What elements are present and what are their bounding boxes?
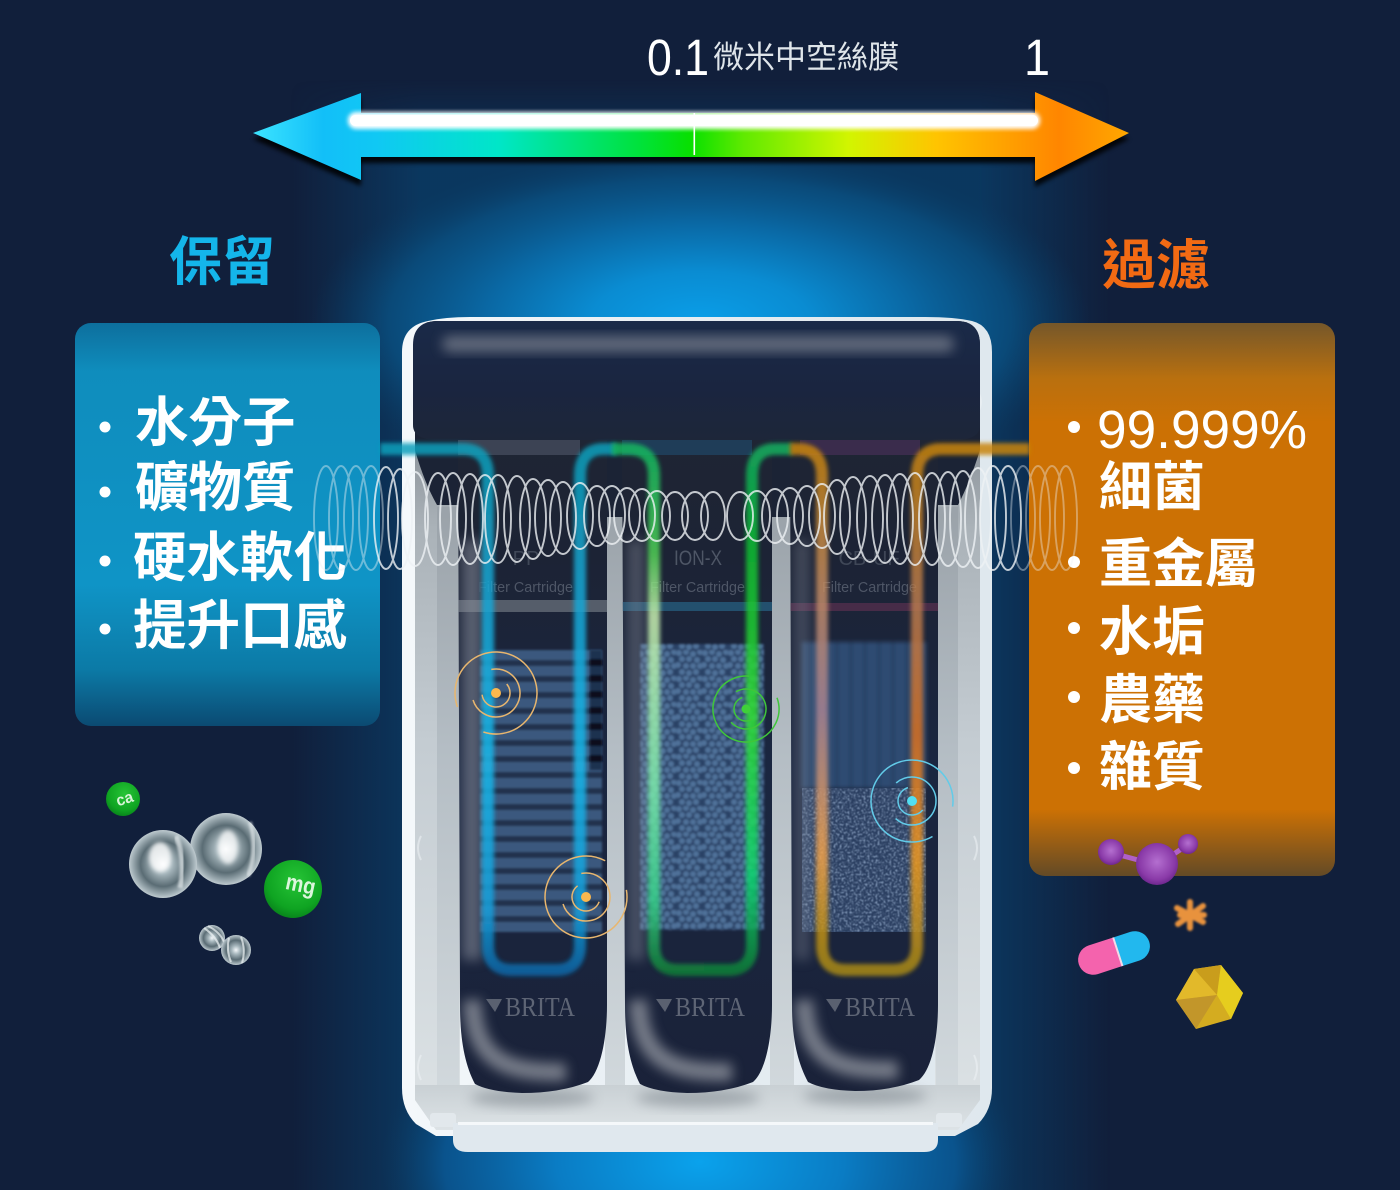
cartridge: CB bbox=[790, 440, 938, 1091]
filter unit bbox=[402, 317, 992, 1152]
background bbox=[314, 101, 1087, 1190]
water flow: orange path bbox=[790, 449, 1030, 970]
item: pesticides: 農藥 bbox=[1099, 671, 1205, 730]
item: bacteria: 細菌 bbox=[1099, 458, 1205, 517]
item: impurities: 雜質 bbox=[1099, 738, 1205, 797]
heading: membrane scale labels bbox=[647, 29, 1050, 86]
inner posts bbox=[437, 507, 958, 1097]
housing frame bbox=[402, 317, 992, 1136]
panel: filtered items bbox=[1029, 323, 1335, 876]
label: 1: 1 bbox=[1024, 29, 1050, 86]
cartridge: CB: CB-UF bbox=[838, 548, 900, 570]
item: water softening: 硬水軟化 bbox=[133, 529, 347, 588]
icon: orange particle bbox=[1177, 902, 1204, 928]
cartridge: PP: Filter Cartridge bbox=[478, 579, 573, 596]
icon: magnesium ball: mg bbox=[283, 868, 318, 900]
item: bacteria bbox=[1068, 400, 1307, 517]
water flow: blue path bbox=[380, 449, 616, 970]
water flow: green path bbox=[612, 449, 792, 970]
cartridge: ION-X: ION-X bbox=[674, 547, 722, 570]
icon: yellow polyhedron bbox=[1176, 965, 1243, 1029]
icon: calcium ball: ca bbox=[114, 789, 136, 810]
cartridge: PP: PP bbox=[513, 548, 539, 570]
helix: hollow fibre coil bbox=[314, 466, 1077, 570]
BRITA logo PP: BRITA bbox=[505, 992, 575, 1022]
icon: purple molecule bbox=[1098, 834, 1198, 885]
floor bbox=[415, 1085, 980, 1130]
heading: retained: 保留 bbox=[169, 233, 275, 292]
base tray bbox=[430, 1113, 962, 1152]
BRITA logo CB: BRITA bbox=[845, 992, 915, 1022]
label: hollow fibre membrane: 微米中空絲膜 bbox=[713, 40, 899, 75]
BRITA logo ION-X: BRITA bbox=[675, 992, 745, 1022]
cartridge: ION-X bbox=[622, 440, 772, 1093]
item: bacteria: 99.999% bbox=[1097, 400, 1307, 460]
item: water molecules: 水分子 bbox=[135, 394, 296, 453]
cartridge: CB: Filter Cartridge bbox=[822, 579, 917, 596]
icon: magnesium ball bbox=[264, 860, 322, 918]
right wall bbox=[935, 450, 980, 1100]
signal rings: green bbox=[704, 667, 788, 751]
cartridge: PP bbox=[456, 440, 608, 1093]
icon: calcium ball bbox=[106, 782, 140, 816]
item: improved taste: 提升口感 bbox=[133, 597, 347, 656]
label: 0.1: 0.1 bbox=[647, 29, 709, 86]
item: limescale: 水垢 bbox=[1099, 603, 1205, 662]
heading: filtered: 過濾 bbox=[1102, 236, 1210, 296]
lid bbox=[413, 321, 980, 440]
icon: water molecules large bbox=[129, 813, 262, 898]
signal rings: orange upper bbox=[443, 640, 549, 746]
signal rings: cyan bbox=[856, 745, 968, 857]
wall clips bbox=[412, 392, 981, 1080]
housing dark interior bbox=[415, 321, 980, 530]
icon: pill bbox=[1074, 927, 1154, 979]
floor shadows bbox=[470, 1087, 927, 1107]
left wall bbox=[415, 450, 460, 1100]
panel: retained items bbox=[75, 323, 380, 726]
cartridge: ION-X: Filter Cartridge bbox=[650, 579, 745, 596]
item: heavy metals: 重金屬 bbox=[1099, 535, 1258, 594]
item: minerals: 礦物質 bbox=[135, 459, 296, 518]
icon: water molecules small bbox=[199, 925, 251, 965]
signal rings: orange lower bbox=[539, 850, 633, 944]
arrow: pore size scale bbox=[253, 92, 1129, 187]
